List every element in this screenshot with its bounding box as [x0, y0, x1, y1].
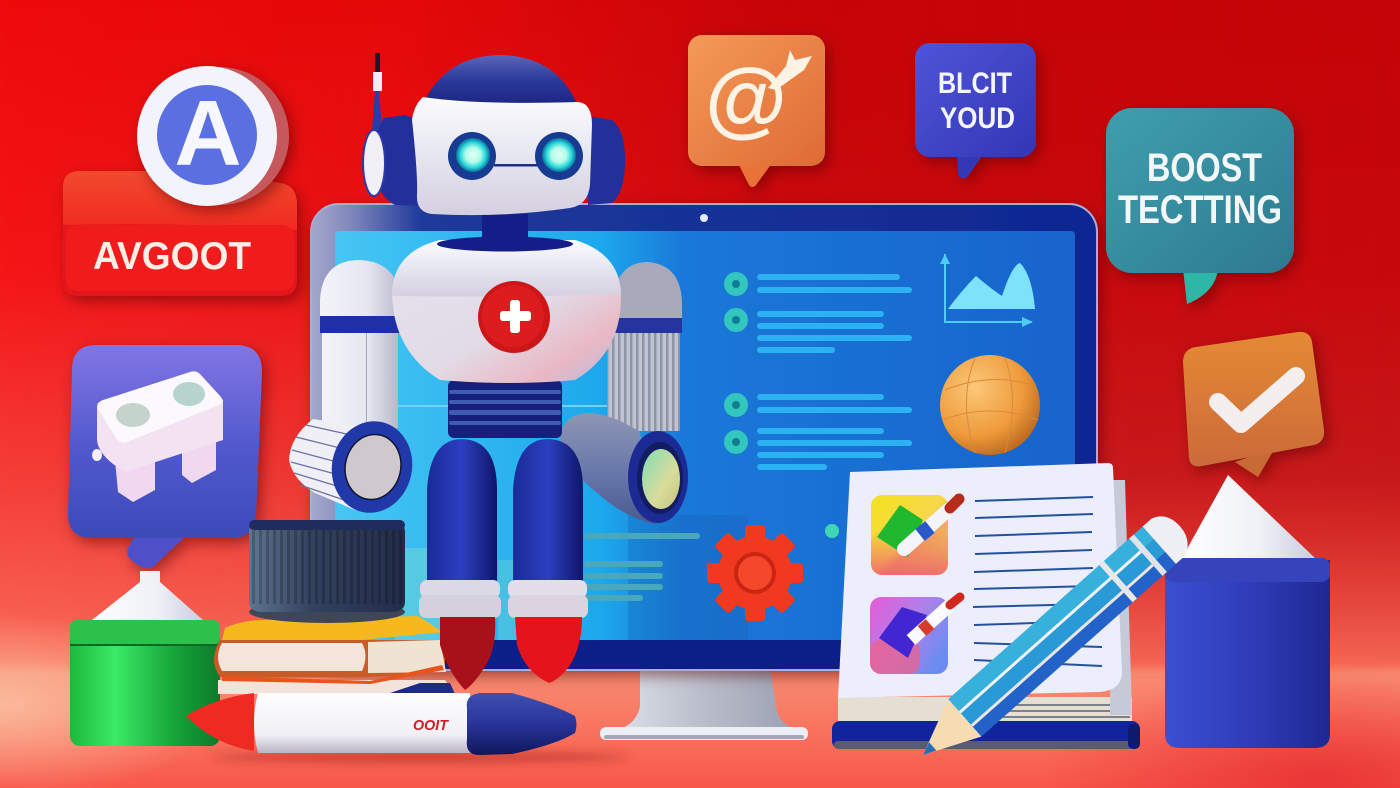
coil: [448, 380, 562, 438]
wood tip: [906, 699, 981, 774]
notebook: [832, 463, 1140, 749]
icon card: violet bubble with white block: [68, 345, 262, 568]
notebook lines: [973, 497, 1102, 666]
list item 2: [724, 308, 912, 353]
monitor frame: [311, 204, 1097, 670]
orange @ bubble: [688, 35, 825, 187]
blue cup with cone: [1165, 475, 1330, 748]
bubble text: BOOST: [1147, 146, 1262, 190]
bubble text: [938, 67, 1015, 135]
letter A: A: [174, 81, 242, 185]
sticker: green check pen: [871, 495, 959, 575]
right ear: [588, 116, 625, 205]
face plate: [412, 97, 592, 215]
antenna: [372, 53, 382, 130]
green cup with cone: [70, 571, 220, 746]
monitor stand: [600, 668, 808, 740]
at-sign icon: @: [705, 51, 787, 145]
list item 1: [724, 272, 912, 296]
marker pen: [186, 693, 630, 762]
right arm: [560, 262, 688, 524]
pencil body: [948, 525, 1155, 712]
front page: [838, 463, 1122, 698]
blue bar: [832, 721, 1140, 749]
button label: AVGOOT: [93, 235, 251, 278]
violet bubble: [68, 345, 262, 568]
orange ball: [940, 355, 1040, 455]
teal bubble BOOST TECTTING: [1106, 108, 1294, 304]
screen list: [724, 272, 912, 470]
red gear: [707, 525, 803, 621]
blue bubble BLCIT YOUD: [915, 43, 1036, 179]
bubble text: TECTTING: [1118, 188, 1282, 232]
red cross emblem: [478, 281, 550, 353]
teal dot: [825, 524, 839, 538]
monitor: [311, 204, 1097, 740]
right hand: [560, 413, 688, 524]
lower book: [218, 680, 455, 694]
head: [363, 55, 625, 215]
monitor screen: [335, 231, 1075, 669]
pencil: [906, 508, 1197, 774]
neck: [437, 214, 573, 252]
top yellow book: [222, 616, 443, 640]
dome: [423, 55, 577, 104]
red button: [63, 171, 297, 296]
left arm: [289, 260, 421, 520]
check icon: [1218, 376, 1296, 424]
back page: [1110, 480, 1132, 715]
torso: [392, 240, 621, 383]
sticker: purple pen: [870, 597, 960, 674]
white block icon: [92, 371, 223, 502]
books stack: [214, 616, 455, 694]
area chart: [940, 254, 1035, 327]
legs: [419, 439, 588, 690]
badge: AVGOOT with letter A: [63, 66, 297, 296]
orange check bubble: [1183, 332, 1324, 477]
dark knob: [249, 520, 405, 623]
faint screen lines: [584, 533, 700, 601]
left ear: [372, 115, 425, 206]
left hand: [289, 414, 421, 520]
list item 4: [724, 428, 912, 470]
list item 3: [724, 393, 912, 417]
webcam: [700, 214, 708, 222]
pen label: OOIT: [413, 717, 450, 734]
letter A circle: [137, 66, 289, 206]
bubble text: YOUD: [940, 102, 1015, 135]
eyes: [448, 132, 583, 180]
bubble text: BLCIT: [938, 67, 1012, 100]
eraser: [1143, 508, 1197, 564]
robot: [289, 53, 688, 690]
bubble text: [1118, 146, 1282, 232]
middle book: [214, 640, 445, 678]
book base: [838, 697, 1132, 722]
